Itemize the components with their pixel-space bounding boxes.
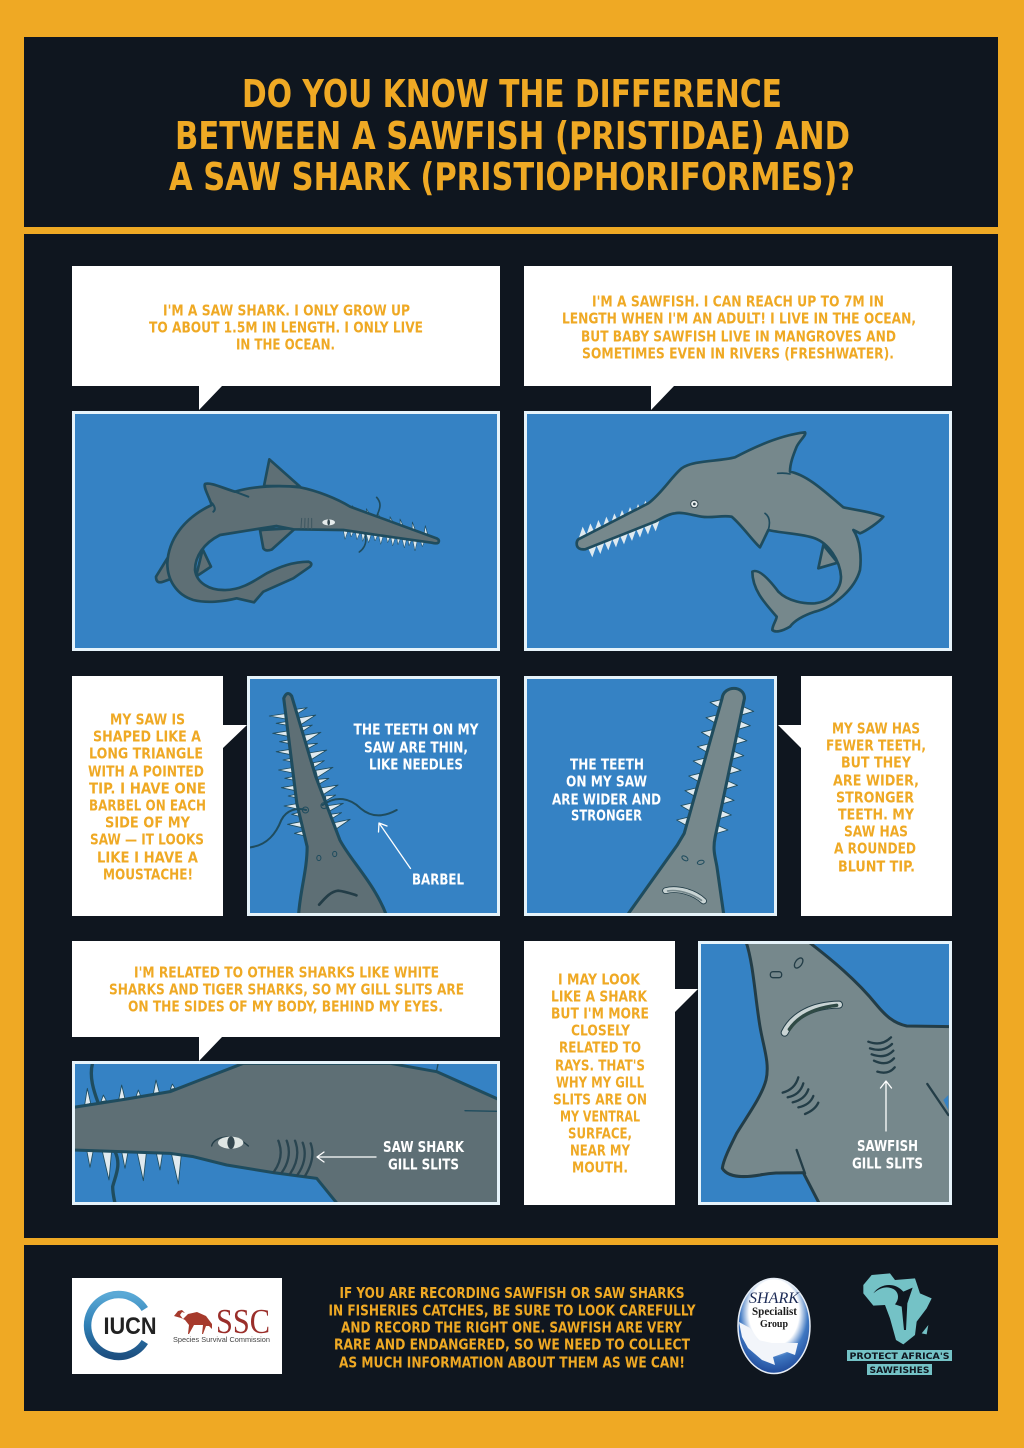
speech bubble: sawfish saw shape: STRONGER [836, 788, 914, 806]
speech bubble: saw shark saw shape [72, 676, 247, 916]
logo: Protect Africa's Sawfishes: PROTECT AFRICA'S [850, 1352, 950, 1362]
speech bubble: sawfish gill slits: SLITS ARE ON [553, 1090, 647, 1108]
arrow: saw shark gill slits [317, 1152, 376, 1162]
speech bubble: sawfish gill slits: CLOSELY [571, 1022, 631, 1040]
label: wider teeth: THE TEETH [570, 756, 644, 774]
label: needle teeth [354, 720, 479, 774]
speech bubble: sawfish gill slits: MY VENTRAL [560, 1108, 640, 1126]
logo: Shark Specialist Group: Specialist [752, 1304, 797, 1318]
label: wider teeth: STRONGER [571, 806, 642, 824]
speech bubble: saw shark size: IN THE OCEAN. [236, 336, 335, 354]
speech bubble: sawfish saw shape: BLUNT TIP. [838, 858, 915, 876]
footer message: IN FISHERIES CATCHES, BE SURE TO LOOK CAREFULLY [328, 1302, 696, 1320]
logo: IUCN and SSC: SSC [216, 1302, 270, 1341]
illustration: sawfish underside [722, 942, 953, 1205]
label: saw shark gill slits: GILL SLITS [388, 1156, 459, 1174]
logo: Shark Specialist Group: SHARK [749, 1290, 800, 1307]
speech bubble: sawfish size [524, 266, 952, 410]
speech bubble: saw shark saw shape: SAW — IT LOOKS [90, 830, 204, 848]
speech bubble: saw shark saw shape: MY SAW IS [110, 710, 185, 728]
speech bubble: saw shark size: I'M A SAW SHARK. I ONLY GROW UP [163, 302, 410, 320]
speech bubble: sawfish saw shape: FEWER TEETH, [826, 736, 926, 754]
speech bubble: sawfish gill slits: RAYS. THAT'S [555, 1056, 645, 1074]
label: wider teeth: ARE WIDER AND [552, 790, 661, 808]
label: barbel: BARBEL [412, 870, 464, 888]
speech bubble: saw shark saw shape: SHAPED LIKE A [93, 728, 201, 746]
label: needle teeth: SAW ARE THIN, [364, 738, 468, 756]
speech bubble: sawfish size: SOMETIMES EVEN IN RIVERS (FRESHWATER). [582, 344, 894, 362]
speech bubble: sawfish saw shape: MY SAW HAS [832, 720, 920, 738]
footer message: AS MUCH INFORMATION ABOUT THEM AS WE CAN! [339, 1354, 685, 1372]
illustration: sawfish [577, 432, 883, 631]
arrow: barbel [378, 823, 410, 868]
speech bubble: sawfish gill slits: WHY MY GILL [556, 1074, 644, 1092]
label: saw shark gill slits: SAW SHARK [383, 1138, 465, 1156]
speech bubble: sawfish gill slits: SURFACE, [568, 1124, 632, 1142]
footer message [328, 1284, 696, 1372]
speech bubble: sawfish saw shape: BUT THEY [841, 754, 912, 772]
speech bubble: sawfish size: BUT BABY SAWFISH LIVE IN MANGROVES AND [581, 328, 896, 346]
speech bubble: saw shark saw shape: MOUSTACHE! [103, 866, 193, 884]
logo: Protect Africa's Sawfishes [847, 1273, 952, 1376]
illustration: saw shark [156, 459, 439, 602]
label: needle teeth: THE TEETH ON MY [354, 720, 479, 738]
title [169, 72, 855, 199]
speech bubble: sawfish gill slits: MOUTH. [572, 1158, 628, 1176]
panel: saw shark needle teeth [248, 678, 498, 915]
speech bubble: saw shark size [72, 266, 500, 410]
speech bubble: saw shark saw shape: WITH A POINTED [88, 762, 204, 780]
panel: saw shark gill slits [73, 1062, 500, 1205]
title: BETWEEN A SAWFISH (PRISTIDAE) AND [175, 114, 850, 158]
panel: sawfish gill slits [700, 942, 953, 1205]
footer panel [24, 1245, 998, 1411]
speech bubble: sawfish gill slits: I MAY LOOK [558, 970, 641, 988]
logo: Shark Specialist Group: Group [760, 1318, 788, 1330]
speech bubble: saw shark saw shape: LONG TRIANGLE [89, 744, 203, 762]
footer message: AND RECORD THE RIGHT ONE. SAWFISH ARE VERY [341, 1318, 683, 1336]
title: A SAW SHARK (PRISTIOPHORIFORMES)? [169, 155, 855, 199]
logo: Shark Specialist Group [738, 1278, 810, 1374]
speech bubble: saw shark saw shape: BARBEL ON EACH [89, 796, 206, 814]
speech bubble: saw shark saw shape: TIP. I HAVE ONE [89, 780, 206, 798]
panel: sawfish wide teeth [526, 678, 776, 915]
speech bubble: sawfish saw shape: SAW HAS [844, 822, 908, 840]
label: wider teeth: ON MY SAW [566, 772, 647, 790]
speech bubble: sawfish saw shape: ARE WIDER, [833, 772, 919, 790]
speech bubble: sawfish size: LENGTH WHEN I'M AN ADULT! I LIVE IN THE OCEAN, [562, 310, 916, 328]
speech bubble: sawfish gill slits: LIKE A SHARK [551, 988, 648, 1006]
illustration: saw shark head side view [73, 1063, 500, 1205]
speech bubble: sawfish size: I'M A SAWFISH. I CAN REACH UP TO 7M IN [592, 292, 884, 310]
label: sawfish gill slits [852, 1137, 923, 1172]
speech bubble: saw shark gill slits: I'M RELATED TO OTHER SHARKS LIKE WHITE [134, 964, 439, 982]
illustration: sawfish saw [627, 688, 754, 915]
speech bubble: sawfish saw shape: TEETH. MY [838, 806, 915, 824]
panel: saw shark full body [74, 412, 498, 650]
label: sawfish gill slits: GILL SLITS [852, 1154, 923, 1172]
title: DO YOU KNOW THE DIFFERENCE [242, 72, 782, 116]
logo: IUCN and SSC: Species Survival Commission [173, 1335, 270, 1344]
label: sawfish gill slits: SAWFISH [857, 1137, 918, 1155]
label: needle teeth: LIKE NEEDLES [369, 756, 463, 774]
speech bubble: sawfish gill slits: BUT I'M MORE [551, 1004, 649, 1022]
footer message: RARE AND ENDANGERED, SO WE NEED TO COLLECT [334, 1336, 691, 1354]
main comic panel background [24, 234, 998, 1238]
logo: IUCN and SSC: IUCN [104, 1313, 156, 1340]
label: saw shark gill slits [383, 1138, 465, 1174]
speech bubble: sawfish gill slits: NEAR MY [570, 1142, 631, 1160]
speech bubble: sawfish saw shape: A ROUNDED [834, 840, 916, 858]
speech bubble: saw shark size: TO ABOUT 1.5M IN LENGTH. I ONLY LIVE [149, 318, 423, 336]
illustration: saw shark saw with barbels [250, 693, 397, 915]
speech bubble: saw shark gill slits: ON THE SIDES OF MY BODY, BEHIND MY EYES. [128, 998, 443, 1016]
arrow: sawfish gill slits [880, 1081, 892, 1131]
label: wider teeth [552, 756, 661, 824]
speech bubble: saw shark saw shape: SIDE OF MY [105, 814, 191, 832]
logo: IUCN and SSC [72, 1278, 282, 1374]
speech bubble: saw shark gill slits [72, 941, 500, 1061]
speech bubble: sawfish gill slits: RELATED TO [559, 1038, 641, 1056]
speech bubble: sawfish saw shape [778, 676, 952, 916]
panel: sawfish full body [526, 412, 950, 650]
speech bubble: saw shark saw shape: LIKE I HAVE A [97, 848, 198, 866]
speech bubble: sawfish gill slits [524, 941, 698, 1205]
footer message: IF YOU ARE RECORDING SAWFISH OR SAW SHARKS [340, 1284, 684, 1302]
logo: Protect Africa's Sawfishes: SAWFISHES [870, 1366, 930, 1376]
title panel [24, 37, 998, 227]
speech bubble: saw shark gill slits: SHARKS AND TIGER SHARKS, SO MY GILL SLITS ARE [109, 980, 464, 998]
